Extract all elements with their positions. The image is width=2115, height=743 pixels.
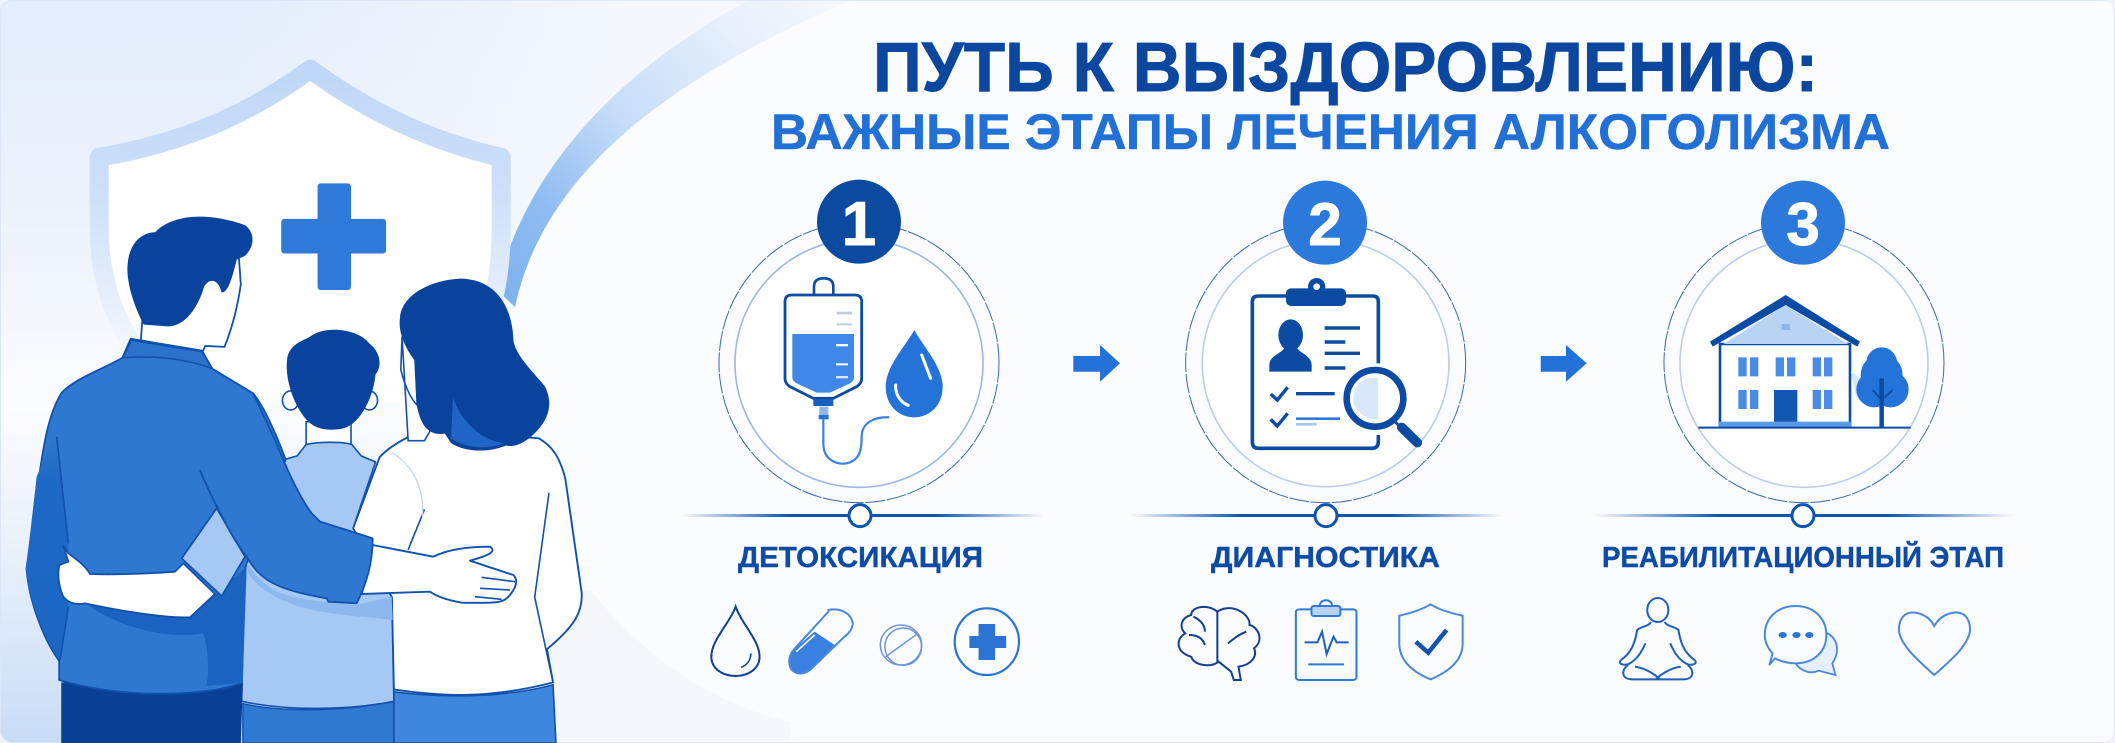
figure: man body bbox=[27, 217, 286, 743]
decorative arc bbox=[497, 1, 850, 307]
rings 3 bbox=[1664, 223, 1944, 503]
man: shading under the arm bbox=[87, 567, 247, 686]
icon: shield with check bbox=[1399, 604, 1463, 679]
step 2: diagnostics bbox=[1130, 181, 1503, 527]
node 3 bbox=[1792, 505, 1814, 527]
step 3: rehabilitation bbox=[1593, 181, 2013, 527]
badge circle 3 bbox=[1761, 181, 1845, 265]
icon: heart bbox=[1899, 612, 1970, 675]
man's hand on woman's back bbox=[362, 545, 516, 603]
arrow 2 bbox=[1541, 345, 1587, 382]
badge number 1: 1 bbox=[842, 190, 876, 259]
label: step 1: ДЕТОКСИКАЦИЯ bbox=[738, 542, 983, 574]
step 1 and 2 small icons bbox=[711, 600, 1356, 680]
icon: tablet bbox=[880, 625, 922, 665]
icon: clipboard with patient card bbox=[1252, 278, 1378, 448]
icon: small drop bbox=[711, 607, 760, 676]
figure: lower details of the group bbox=[26, 393, 516, 686]
arrow 1 bbox=[1073, 345, 1120, 382]
icon: magnifying glass bbox=[1347, 370, 1417, 443]
icon: meditating person bbox=[1620, 598, 1696, 679]
icon: brain bbox=[1179, 607, 1259, 680]
label: step 3: РЕАБИЛИТАЦИОННЫЙ ЭТАП bbox=[1602, 540, 2004, 574]
icon: clipboard with pulse bbox=[1296, 600, 1356, 680]
icon: capsule bbox=[789, 609, 853, 673]
rings 1 bbox=[719, 223, 999, 503]
man's arm bbox=[199, 393, 373, 603]
timeline 3 bbox=[1593, 514, 2013, 517]
label: step 2: ДИАГНОСТИКА bbox=[1211, 542, 1440, 574]
node 2 bbox=[1315, 505, 1337, 527]
badge circle 2 bbox=[1283, 181, 1367, 265]
timeline 2 bbox=[1130, 514, 1503, 517]
step 1: detox bbox=[680, 180, 1043, 527]
timeline 1 bbox=[680, 514, 1043, 517]
rings 2 bbox=[1186, 223, 1466, 503]
icon: water drop bbox=[886, 330, 943, 417]
badge number 3: 3 bbox=[1786, 191, 1820, 258]
icon: medical cross bbox=[281, 183, 386, 290]
title: ПУТЬ К ВЫЗДОРОВЛЕНИЮ: bbox=[873, 28, 1818, 106]
step 2 and 3 small icons bbox=[1399, 598, 1970, 679]
shadow under man's arm bbox=[247, 563, 393, 620]
man: dark back band bbox=[26, 435, 68, 660]
shield bbox=[99, 69, 501, 393]
figure: child bbox=[229, 330, 394, 743]
child sleeve bbox=[182, 508, 245, 596]
figure: woman bbox=[353, 279, 582, 743]
subtitle: ВАЖНЫЕ ЭТАПЫ ЛЕЧЕНИЯ АЛКОГОЛИЗМА bbox=[771, 104, 1890, 160]
icon: IV drip bag bbox=[785, 278, 889, 464]
badge number 2: 2 bbox=[1308, 191, 1342, 258]
node 1 bbox=[849, 505, 871, 527]
icon: speech bubbles bbox=[1765, 606, 1837, 675]
arm around the man's waist bbox=[58, 546, 215, 617]
icon: plus in circle bbox=[955, 608, 1019, 675]
icon: rehabilitation house bbox=[1698, 295, 1911, 428]
icon: tree bbox=[1851, 347, 1909, 428]
badge circle 1 bbox=[817, 180, 901, 264]
illustration: family and shield bbox=[27, 69, 582, 743]
